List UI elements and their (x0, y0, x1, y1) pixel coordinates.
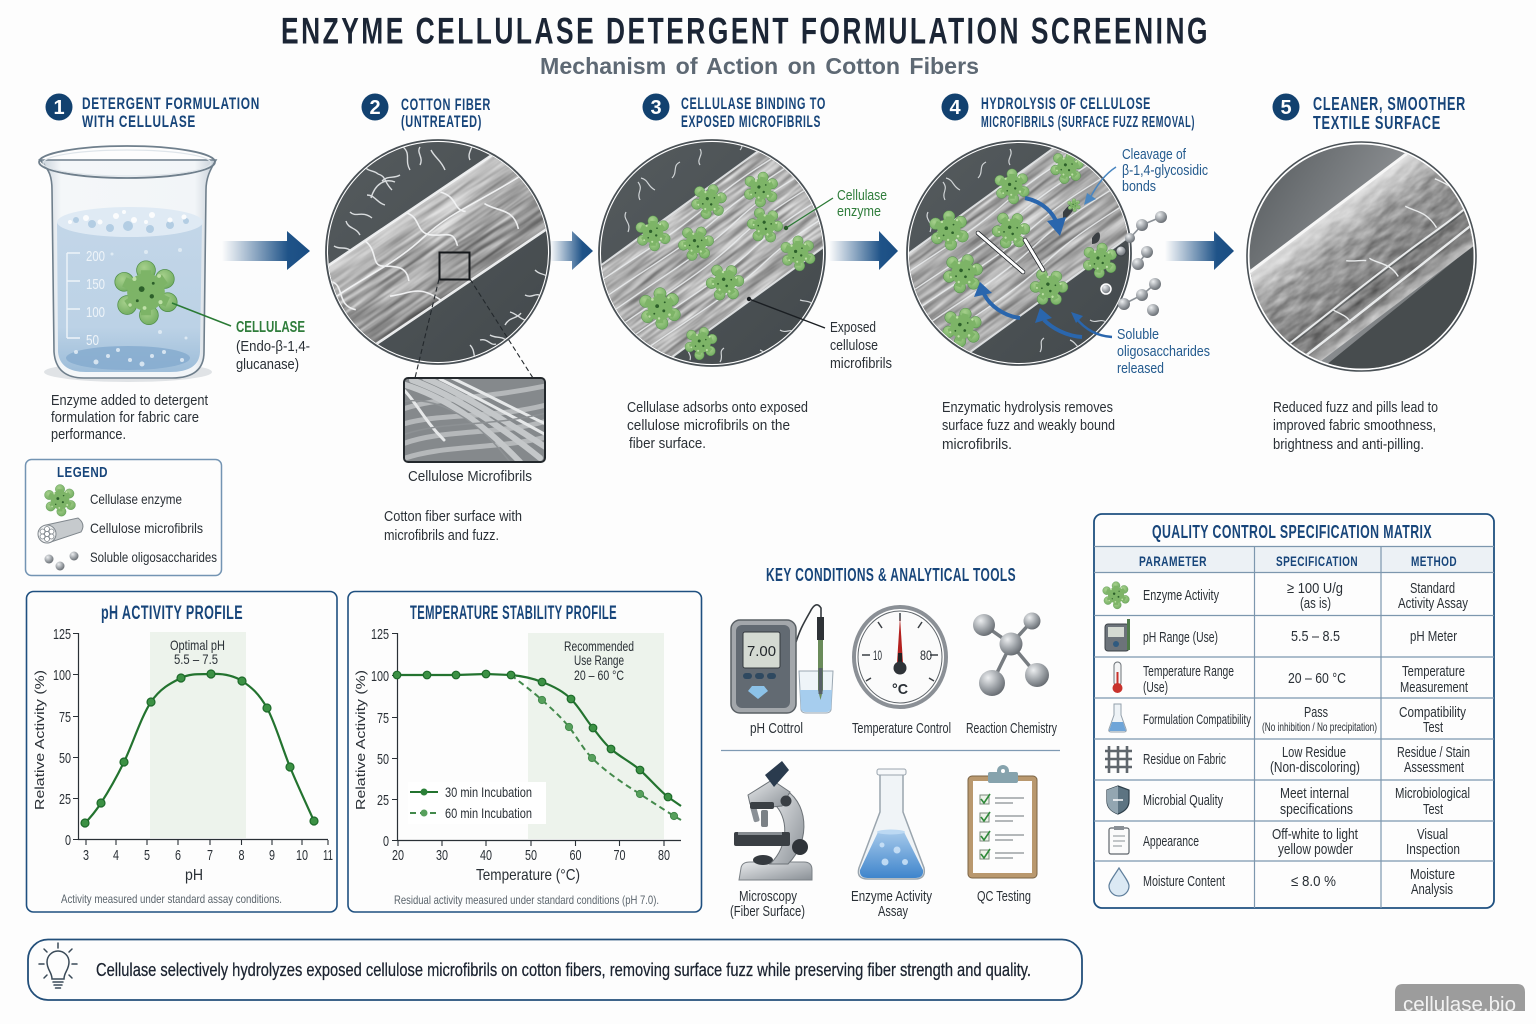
icon: beaker with cellulase: 50 (86, 332, 99, 349)
step 1 heading: WITH CELLULASE (82, 112, 196, 131)
row: microbial quality: specifications (1280, 801, 1353, 818)
row: temperature range: Temperature Range (1143, 663, 1234, 680)
pH chart axes: Relative Activity (%) (32, 670, 47, 810)
step 1 description: Enzyme added to detergent (51, 392, 209, 409)
temperature chart axes: 20 (392, 847, 404, 864)
label: exposed cellulose microfibrils: microfibrils (830, 355, 892, 372)
step 5 description (1273, 399, 1438, 453)
tool: microscope: (Fiber Surface) (730, 903, 805, 920)
temperature chart axes (353, 626, 681, 884)
row: appearance: yellow powder (1278, 841, 1353, 858)
pH chart axes: 8 (238, 847, 244, 864)
temperature chart axes: Temperature (°C) (476, 867, 580, 884)
row: residue on fabric: Assessment (1404, 759, 1465, 776)
row: enzyme activity: Activity Assay (1398, 595, 1468, 612)
row: residue on fabric (1105, 744, 1470, 776)
step 4 heading: 4 (949, 97, 961, 119)
row: microbial quality: Meet internal (1280, 785, 1349, 802)
step 3 panel (598, 94, 892, 448)
tool: temperature gauge: 80 (920, 647, 932, 663)
step 4 description: surface fuzz and weakly bound (942, 417, 1115, 434)
optimal pH band: 5.5 – 7.5 (174, 651, 218, 667)
step 4 heading: HYDROLYSIS OF CELLULOSE (981, 94, 1151, 113)
legend: cellulose microfibrils: Cellulose microfibrils (90, 520, 203, 536)
row: formulation compatibility: Compatibility (1399, 704, 1466, 721)
row: enzyme activity: (as is) (1300, 595, 1331, 612)
pH chart axes: pH (185, 867, 203, 884)
row: temperature range: (Use) (1143, 679, 1168, 696)
matrix header row: PARAMETER (1139, 553, 1207, 569)
cellulase callout: CELLULASE (236, 319, 305, 336)
row: enzyme activity (1103, 580, 1468, 612)
step 5 description: improved fabric smoothness, (1273, 417, 1436, 434)
row: temperature range: Measurement (1400, 679, 1469, 696)
cellulase callout: glucanase) (236, 356, 299, 373)
matrix header row: SPECIFICATION (1276, 553, 1358, 569)
temperature chart axes: 50 (525, 847, 537, 864)
panel: pH activity profile (26, 592, 337, 912)
curve: 60 min incubation (511, 675, 681, 820)
tool: erlenmeyer flask (851, 769, 932, 920)
pH chart axes: 4 (113, 847, 119, 864)
temperature chart axes: 0 (383, 833, 389, 850)
pH chart axes: 6 (175, 847, 181, 864)
pH chart axes: 10 (296, 847, 308, 864)
step 1 panel (39, 94, 310, 443)
step 2 heading: 2 (369, 97, 381, 119)
step 1 heading (46, 94, 260, 131)
watermark (1395, 984, 1525, 1016)
row: enzyme activity: ≥ 100 U/g (1287, 580, 1343, 597)
row: moisture content (1109, 866, 1455, 898)
tool: temperature gauge (852, 607, 951, 737)
temperature chart axes: 30 (436, 847, 448, 864)
label: soluble oligosaccharides released: oligosaccharides (1117, 343, 1210, 360)
pH chart axes: 75 (59, 709, 71, 726)
label: cleavage of glycosidic bonds: bonds (1122, 178, 1156, 195)
step 4 panel (906, 94, 1210, 449)
legend (26, 460, 222, 576)
arrow 3 to 4 (829, 231, 898, 270)
matrix header row (1095, 547, 1493, 572)
tool: molecule model (966, 612, 1057, 737)
recommended use range band: Use Range (574, 652, 624, 668)
watermark: cellulase.bio (1403, 994, 1516, 1016)
step 3 description (627, 399, 808, 452)
row: moisture content: Moisture Content (1143, 873, 1226, 890)
temperature chart axes: 25 (377, 792, 389, 809)
temperature chart axes: 70 (614, 847, 626, 864)
row: formulation compatibility: Pass (1304, 704, 1328, 721)
chart legend (408, 782, 546, 824)
row: enzyme activity: Standard (1410, 580, 1455, 597)
step 3 heading: 3 (650, 97, 662, 119)
pH chart axes (32, 626, 333, 884)
legend: cellulase enzyme: Cellulase enzyme (90, 491, 182, 507)
inset: cellulose microfibrils (400, 378, 550, 462)
tool: temperature gauge: °C (892, 681, 908, 698)
label: soluble oligosaccharides released: released (1117, 360, 1164, 377)
subtitle: Mechanism of Action on Cotton Fibers (540, 53, 979, 79)
label: soluble oligosaccharides released (1071, 312, 1210, 377)
label: exposed cellulose microfibrils (747, 297, 892, 372)
step 3 heading: EXPOSED MICROFIBRILS (681, 112, 821, 131)
row: formulation compatibility (1109, 704, 1466, 736)
curve: 30 min incubation (393, 670, 681, 806)
temperature chart axes: Relative Activity (%) (353, 670, 368, 810)
step 2 description (384, 508, 522, 544)
step 4 description: Enzymatic hydrolysis removes (942, 399, 1113, 416)
pH chart axes: 50 (59, 750, 71, 767)
row: residue on fabric: Residue on Fabric (1143, 751, 1226, 768)
tool: temperature gauge: Temperature Control (852, 720, 951, 737)
step 2 description: Cotton fiber surface with (384, 508, 522, 525)
step 3 description: fiber surface. (629, 435, 706, 452)
optimal pH band (150, 632, 246, 838)
recommended use range band: Recommended (564, 638, 634, 654)
row: appearance: Visual (1417, 826, 1448, 843)
label: cellulase enzyme: Cellulase (837, 187, 887, 204)
label: exposed cellulose microfibrils: cellulose (830, 337, 878, 354)
micrograph: smooth fiber (1246, 141, 1477, 372)
temperature chart axes: 100 (371, 668, 389, 685)
row: residue on fabric: Low Residue (1282, 744, 1346, 761)
step 2 panel (325, 94, 551, 540)
pH chart axes: 5 (144, 847, 150, 864)
legend: soluble oligosaccharides (44, 549, 217, 570)
takeaway text: Cellulase selectively hydrolyzes exposed cellulose microfibrils on cotton fibers, removing surface fuzz while preserving fiber strength and quality. (96, 960, 1031, 980)
icon: light bulb (39, 943, 77, 988)
arrow 4 to 5 (1165, 231, 1234, 270)
label: cleavage of glycosidic bonds: Cleavage of (1122, 146, 1187, 163)
row: appearance: Appearance (1143, 833, 1199, 850)
pH chart axes: 11 (323, 847, 333, 864)
step 5 description: brightness and anti-pilling. (1273, 436, 1424, 453)
micrograph: enzyme bound to fibers (598, 139, 826, 367)
pH chart footnote: Activity measured under standard assay conditions. (61, 892, 282, 906)
legend: soluble oligosaccharides: Soluble oligosaccharides (90, 549, 217, 565)
label: exposed cellulose microfibrils: Exposed (830, 319, 876, 336)
arrow 2 to 3 (550, 231, 593, 270)
row: moisture content: ≤ 8.0 % (1291, 873, 1336, 890)
step 1 heading: DETERGENT FORMULATION (82, 94, 260, 113)
cellulase callout (172, 303, 310, 373)
pH chart axes: 3 (83, 847, 89, 864)
step 2 heading (362, 94, 491, 131)
step 3 heading: CELLULASE BINDING TO (681, 94, 826, 113)
pH chart heading: pH ACTIVITY PROFILE (101, 603, 243, 624)
step 4 heading: MICROFIBRILS (SURFACE FUZZ REMOVAL) (981, 114, 1195, 131)
row: temperature range: 20 – 60 °C (1288, 670, 1346, 687)
temperature chart axes: 50 (377, 751, 389, 768)
row: pH range: 5.5 – 8.5 (1291, 628, 1340, 645)
temperature chart axes: 125 (371, 626, 389, 643)
cellulase callout: (Endo-β-1,4- (236, 338, 310, 355)
step 4 description: microfibrils. (942, 436, 1012, 453)
pH chart axes: 9 (269, 847, 275, 864)
row: formulation compatibility: (No inhibition / No precipitation) (1262, 720, 1377, 734)
label: cellulase enzyme (784, 187, 887, 230)
panel: temperature stability profile (348, 592, 702, 912)
step 1 heading: 1 (53, 97, 65, 119)
row: formulation compatibility: Test (1423, 719, 1444, 736)
temperature chart axes: 40 (480, 847, 492, 864)
step 2 heading: COTTON FIBER (401, 95, 491, 114)
label: soluble oligosaccharides released: Soluble (1117, 326, 1159, 343)
row: formulation compatibility: Formulation Compatibility (1143, 711, 1251, 727)
legend: LEGEND (57, 464, 108, 481)
row: pH range: pH Meter (1410, 628, 1457, 645)
pH chart axes: 25 (59, 791, 71, 808)
tools heading: KEY CONDITIONS & ANALYTICAL TOOLS (766, 565, 1016, 585)
matrix header row: METHOD (1411, 553, 1457, 569)
step 1 description: performance. (51, 426, 126, 443)
icon: beaker with cellulase (39, 146, 216, 382)
row: appearance: Off-white to light (1272, 826, 1359, 843)
row: residue on fabric: (Non-discoloring) (1270, 759, 1360, 776)
temperature chart axes: 75 (377, 710, 389, 727)
tool: QC clipboard (968, 765, 1037, 905)
step 5 heading: TEXTILE SURFACE (1313, 113, 1441, 133)
pH chart axes: 0 (65, 832, 71, 849)
row: appearance (1109, 826, 1460, 858)
legend: cellulose microfibrils (38, 518, 203, 543)
takeaway banner (28, 940, 1082, 1000)
tool: microscope: Microscopy (739, 888, 797, 905)
row: microbial quality: Microbiological (1395, 785, 1470, 802)
icon: beaker with cellulase: 200 (86, 248, 105, 265)
label: cleavage of glycosidic bonds: β-1,4-glycosidic (1122, 162, 1208, 179)
label: cellulase enzyme: enzyme (837, 203, 881, 220)
recommended use range band (528, 633, 664, 839)
row: moisture content: Moisture (1410, 866, 1455, 883)
row: microbial quality: Test (1423, 801, 1444, 818)
tool: erlenmeyer flask: Enzyme Activity (851, 888, 932, 905)
panel: quality control specification matrix (1094, 514, 1494, 908)
legend: cellulase enzyme (45, 485, 182, 516)
step 5 description: Reduced fuzz and pills lead to (1273, 399, 1438, 416)
temperature chart heading: TEMPERATURE STABILITY PROFILE (410, 603, 617, 624)
chart legend: 30 min Incubation (445, 784, 532, 800)
inset label: Cellulose Microfibrils (408, 468, 532, 485)
pH activity curve (81, 670, 318, 827)
step 3 description: cellulose microfibrils on the (627, 417, 790, 434)
tool: pH meter: pH Cottrol (750, 720, 803, 737)
step 4 description (942, 399, 1115, 453)
row: microbial quality (1107, 785, 1470, 818)
row: appearance: Inspection (1406, 841, 1460, 858)
pH chart axes: 7 (207, 847, 213, 864)
step 5 heading: CLEANER, SMOOTHER (1313, 94, 1466, 114)
row: temperature range: Temperature (1402, 663, 1465, 680)
panel: key conditions and analytical tools (721, 565, 1060, 920)
icon: beaker with cellulase: 150 (86, 276, 105, 293)
row: residue on fabric: Residue / Stain (1397, 744, 1470, 761)
label: cleavage of glycosidic bonds (1084, 146, 1208, 205)
step 5 heading (1272, 94, 1466, 133)
icon: beaker with cellulase: 100 (86, 304, 105, 321)
step 5 panel (1246, 94, 1477, 452)
tool: erlenmeyer flask: Assay (878, 903, 908, 920)
tool: QC clipboard: QC Testing (977, 888, 1031, 905)
micrograph: hydrolysis (906, 140, 1132, 366)
chart legend: 60 min Incubation (445, 805, 532, 821)
step 2 heading: (UNTREATED) (401, 112, 482, 131)
temperature chart footnote: Residual activity measured under standard conditions (pH 7.0). (394, 893, 659, 907)
temperature chart axes: 80 (658, 847, 670, 864)
tool: temperature gauge: 10 (873, 647, 882, 663)
step 4 heading (942, 94, 1195, 131)
recommended use range band: 20 – 60 °C (574, 667, 624, 683)
temperature chart axes: 60 (570, 847, 582, 864)
step 1 description: formulation for fabric care (51, 409, 199, 426)
step 1 description (51, 392, 209, 443)
tool: pH meter (731, 605, 833, 737)
row: microbial quality: Microbial Quality (1143, 792, 1223, 809)
step 3 heading (642, 94, 826, 131)
pH chart axes: 125 (53, 626, 71, 643)
tool: molecule model: Reaction Chemistry (966, 720, 1057, 737)
tool: microscope (730, 761, 812, 920)
step 2 description: microfibrils and fuzz. (384, 527, 499, 544)
arrow 1 to 2 (222, 231, 310, 270)
step 5 heading: 5 (1280, 97, 1292, 119)
row: moisture content: Analysis (1411, 881, 1453, 898)
soluble oligosaccharide chains (1101, 211, 1167, 316)
tool: pH meter: 7.00 (747, 643, 776, 660)
row: pH range (1105, 619, 1457, 651)
step 3 description: Cellulase adsorbs onto exposed (627, 399, 808, 416)
row: pH range: pH Range (Use) (1143, 629, 1218, 646)
micrograph: untreated cotton fiber (325, 139, 551, 377)
row: enzyme activity: Enzyme Activity (1143, 587, 1219, 604)
row: temperature range (1112, 662, 1469, 696)
optimal pH band: Optimal pH (170, 637, 225, 653)
pH chart axes: 100 (53, 667, 71, 684)
